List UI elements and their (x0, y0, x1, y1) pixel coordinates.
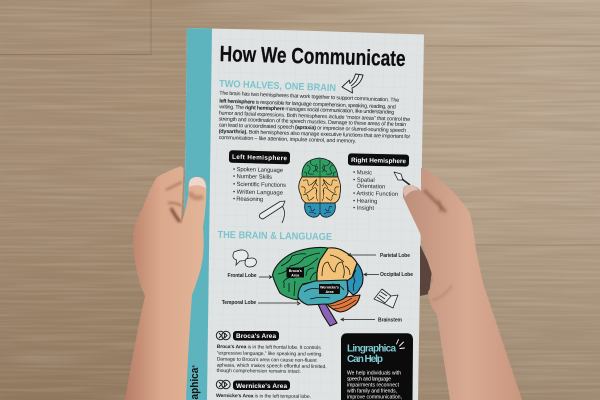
icon: sparkle lines (396, 340, 404, 348)
right hemisphere list: • Artistic Function (353, 191, 398, 198)
rear section, blue (305, 203, 335, 217)
left hemisphere list: • Reasoning (233, 197, 263, 203)
label: occipital lobe: Occipital Lobe (380, 272, 413, 278)
callout: Lingraphica can help (341, 333, 413, 400)
icon: pencil (259, 201, 285, 223)
vertical brand name: ® (191, 365, 196, 368)
left hemisphere list: • Scientific Functions (233, 182, 286, 189)
cerebral folds (278, 253, 356, 309)
callout heading: Lingraphica (347, 344, 396, 354)
label: temporal lobe (222, 300, 300, 306)
Wernicke's area tag: Wernicke's (320, 286, 339, 290)
description: Broca's Area is in the left frontal lobe. It controls (217, 344, 321, 351)
section: Broca's area (216, 331, 327, 375)
label: occipital lobe (364, 272, 413, 278)
temporal lobe (298, 280, 348, 305)
poster sheet (182, 28, 424, 400)
intro text block: can lead to uncoordinated speech (apraxia) or imprecise or slurred-sounding speech (219, 123, 406, 134)
parietal lobe (317, 248, 357, 281)
Wernicke's area tag (319, 284, 340, 294)
callout heading (347, 344, 396, 365)
pill heading: Broca's Area (236, 333, 276, 340)
brainstem (318, 303, 337, 326)
left hemisphere list (233, 167, 286, 203)
section: Wernicke's area (216, 380, 311, 400)
label: frontal lobe: Frontal Lobe (228, 273, 257, 279)
left hemisphere list: • Spoken Language (233, 167, 284, 174)
intro text block: writing. The right hemisphere manages social communication, like understanding (218, 104, 394, 116)
description: Wernicke's Area is in the left temporal lobe. (216, 393, 311, 400)
teal side band (182, 28, 212, 400)
label: frontal lobe (228, 273, 272, 279)
description: Damage to Broca's area can cause non-fluent (217, 357, 317, 364)
pill heading: Wernicke's Area (236, 383, 287, 390)
knuckle shading (424, 190, 452, 300)
left hemisphere list: • Written Language (233, 190, 284, 197)
label: parietal lobe: Parietal Lobe (380, 253, 410, 259)
diagram labels and arrows (222, 253, 413, 324)
callout body (347, 370, 402, 400)
right hemisphere list: Orientation (356, 184, 385, 190)
right hemisphere list: • Spatial (353, 178, 375, 184)
label: parietal lobe (348, 253, 410, 259)
occipital lobe (347, 263, 363, 295)
Broca's area tag (286, 268, 304, 278)
description: aphasia, which makes speech effortful and limited, (217, 363, 327, 370)
vertical brand name: aphica (189, 365, 201, 400)
panel: right hemisphere (348, 153, 409, 212)
heading: the brain and language: THE BRAIN & LANGUAGE (217, 230, 332, 243)
panel: right hemisphere: Right Hemisphere (351, 157, 407, 165)
title: How We Communicate (219, 41, 406, 71)
finger creases and shadow (166, 182, 203, 222)
callout body: with family and friends, (347, 388, 397, 394)
Broca's area tag: Area (291, 274, 300, 278)
icon: double chevrons (216, 380, 230, 389)
intro text block: communication – like attention, impulse control, and memory. (219, 135, 356, 145)
right hemisphere list: • Music (353, 170, 372, 176)
icon: chat bubbles (233, 250, 256, 267)
intro text block: (dysarthria). Both hemispheres also manage executive functions that are important for (219, 129, 410, 140)
panel: left hemisphere (229, 150, 290, 203)
intro text block: humor and facial expressions. Both hemispheres include “motor areas” that control the (219, 111, 410, 123)
intro text block: The brain has two hemispheres that work together to support communication. The (219, 91, 399, 104)
cerebellum (327, 295, 360, 312)
thumb nail (189, 177, 206, 188)
middle section, yellow (299, 177, 341, 203)
Broca's area tag: Broca's (289, 269, 302, 273)
description (216, 344, 327, 375)
frontal lobe (272, 247, 328, 300)
thumb nail (403, 185, 418, 197)
frontal section, green (302, 158, 338, 177)
icon: open book (374, 289, 398, 308)
callout body: impairments reconnect (347, 382, 400, 388)
left hemisphere list: • Number Skills (233, 174, 272, 181)
description: “expressive language,” like speaking and writing. (217, 351, 323, 358)
intro text block: left hemisphere is responsible for language comprehension, speaking, reading, and (219, 99, 396, 111)
right hand (403, 168, 522, 400)
icon: hand-drawn arrow (342, 74, 363, 93)
callout body: We help individuals with (347, 370, 401, 376)
intro text block: strength and coordination of the speech muscles. Damage to these areas of the brain (219, 117, 406, 128)
right hemisphere list (353, 170, 398, 212)
Wernicke's area tag: Area (326, 290, 334, 294)
label: temporal lobe: Temporal Lobe (222, 300, 256, 306)
side-view brain diagram (272, 247, 363, 326)
callout heading: Can Help (347, 354, 383, 365)
left hand (125, 166, 206, 400)
intro text block (218, 91, 410, 145)
right hemisphere list: • Hearing (353, 199, 377, 205)
top-view brain illustration (299, 158, 341, 217)
panel: left hemisphere: Left Hemisphere (232, 154, 288, 162)
icon: paintbrush (394, 172, 410, 185)
heading: two halves, one brain: TWO HALVES, ONE BRAIN (219, 79, 336, 94)
brain folds (301, 159, 339, 214)
label: brainstem (341, 318, 403, 324)
shadow behind palm (420, 245, 432, 296)
label: brainstem: Brainstem (378, 318, 403, 324)
right hemisphere list: • Insight (353, 206, 374, 212)
callout body: speech and language (347, 376, 391, 382)
description: though comprehension remains intact. (216, 368, 301, 375)
icon: double chevrons (216, 331, 230, 340)
